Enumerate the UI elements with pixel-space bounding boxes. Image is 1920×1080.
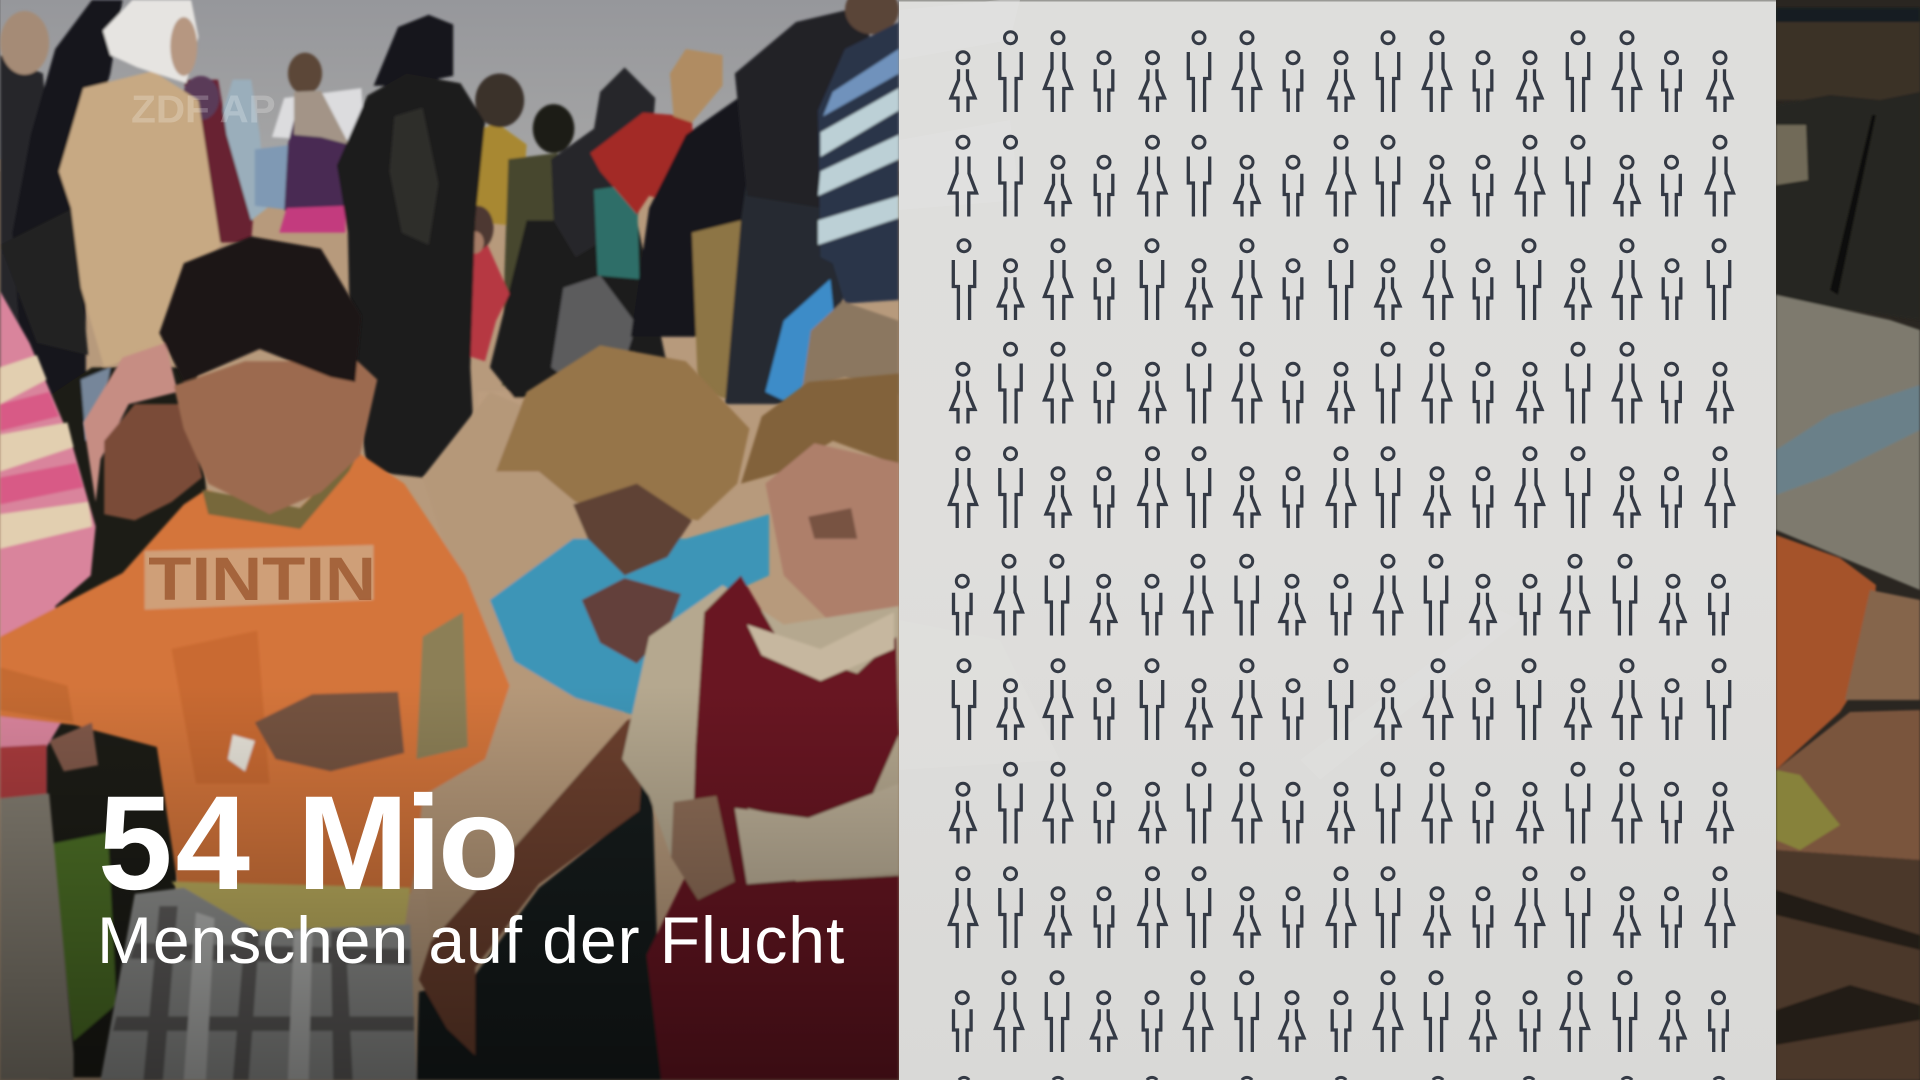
pictogram grid (950, 32, 1734, 1080)
headline number (98, 769, 516, 918)
beige coat woman (59, 71, 221, 367)
panel: grey pictogram board (899, 0, 1776, 1080)
row 8 of figures (951, 763, 1732, 844)
row 6 of figures (954, 555, 1727, 636)
shirt lettering: TINTIN (148, 545, 376, 613)
row 2 of figures (950, 136, 1734, 216)
subheading: Menschen auf der Flucht (97, 903, 845, 977)
row 7 of figures (953, 660, 1730, 740)
row 4 of figures (951, 343, 1732, 424)
row 1 of figures (951, 32, 1732, 112)
right girl (741, 373, 899, 484)
panel: refugee crowd photo (0, 0, 899, 1080)
row 5 of figures (950, 448, 1734, 528)
old woman (83, 343, 178, 502)
row 9 of figures (950, 868, 1734, 948)
dark back of foreground (37, 367, 208, 1078)
photo shading (0, 686, 899, 1080)
row 3 of figures (953, 240, 1730, 320)
black abaya woman (374, 15, 453, 86)
sand area (416, 392, 625, 943)
blond girl (490, 514, 769, 722)
boy head (174, 361, 377, 514)
dark lower centre (416, 686, 661, 1080)
headline number: Mio (297, 769, 516, 918)
left child pink sweater (0, 291, 96, 802)
row 11 of figures, only heads visible (959, 1077, 1724, 1080)
headline number: 54 (98, 769, 253, 918)
waistband and shorts (172, 882, 410, 931)
back crowd (0, 55, 55, 367)
boy shirt (0, 451, 510, 894)
panel: right photo strip (1776, 0, 1920, 1080)
hand (255, 692, 404, 771)
watermark: ZDF AP (131, 88, 276, 131)
row 10 of figures (954, 972, 1727, 1052)
